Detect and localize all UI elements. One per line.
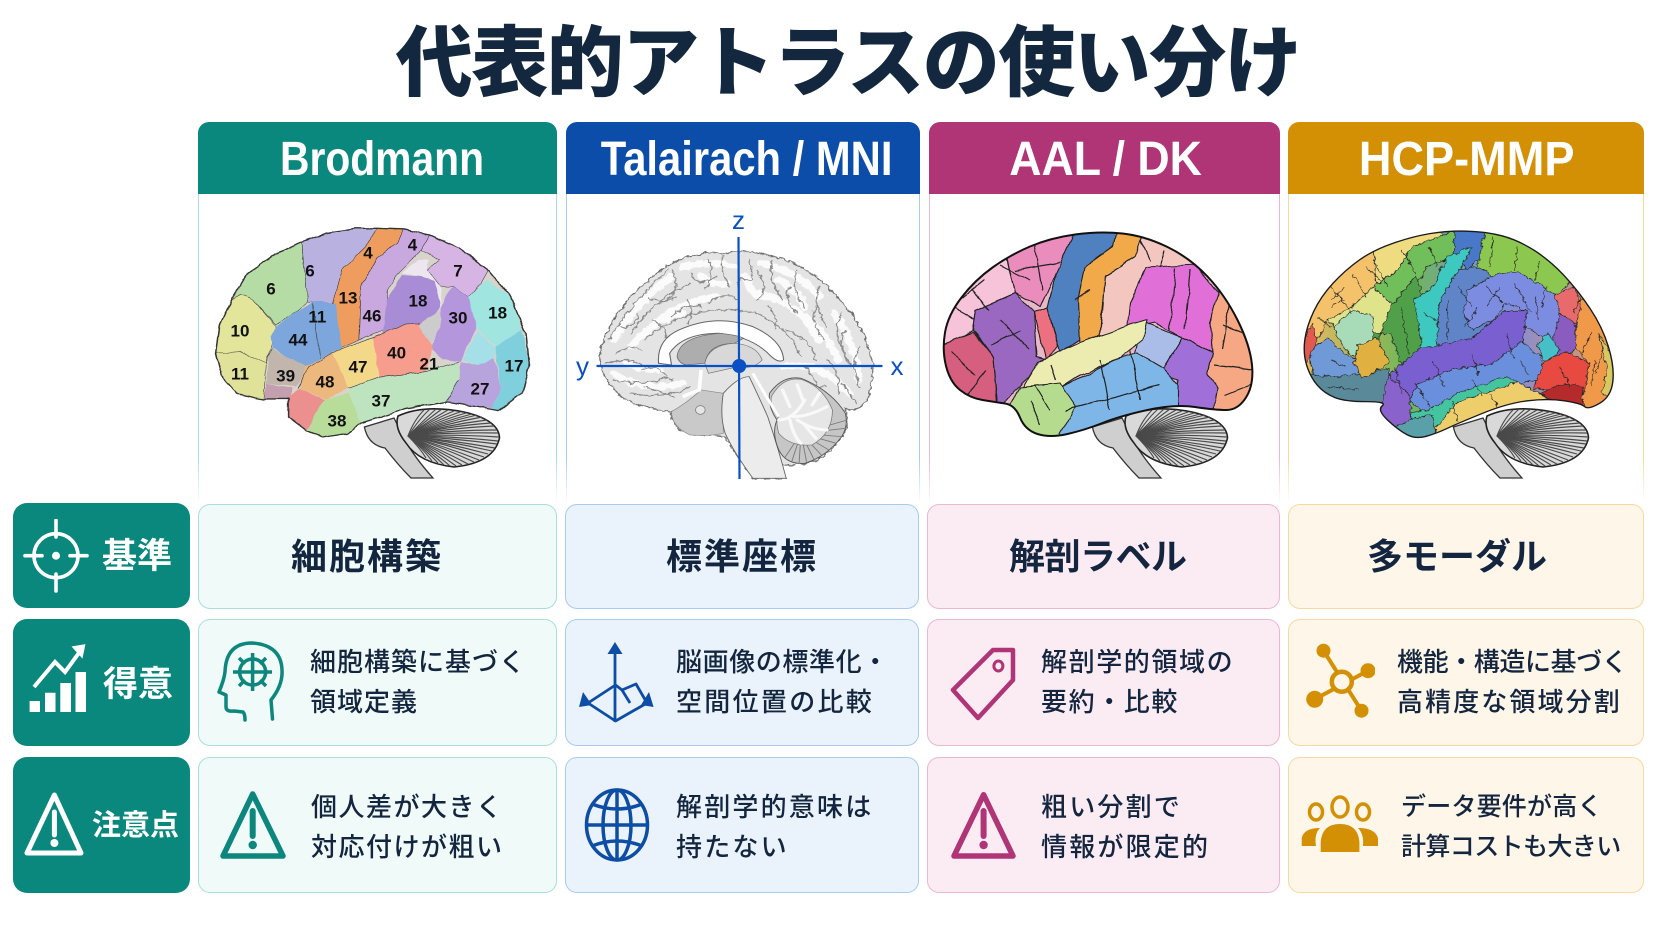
icon: tag <box>950 648 1016 720</box>
heading: HCP-MMP: HCP-MMP <box>1359 133 1575 186</box>
illustration: Brodmann numbered brain: 6 <box>305 262 315 280</box>
illustration: Brodmann numbered brain: 10 <box>231 322 249 340</box>
illustration: Brodmann numbered brain: 4 <box>363 244 373 262</box>
text: Talairach 注意点: 解剖学的意味は <box>676 792 873 822</box>
label text: 注意点 <box>92 810 179 842</box>
icon: warning pink <box>951 792 1016 859</box>
row label: 注意点 <box>13 757 190 893</box>
text: Brodmann 注意点: 個人差が大きく <box>311 792 504 822</box>
illustration: Brodmann numbered brain: 21 <box>420 354 438 374</box>
illustration: Brodmann numbered brain: 18 <box>409 292 427 310</box>
text: AAL 注意点: 粗い分割で <box>1041 792 1182 822</box>
panel: AAL brain image <box>929 194 1280 504</box>
value: 多モーダル: 多モーダル <box>1367 536 1547 577</box>
icon: 3D axes <box>579 642 654 722</box>
axes: x y z <box>576 205 903 479</box>
icon: people <box>1302 795 1378 852</box>
card: Talairach 基準 <box>565 504 918 609</box>
text: Talairach 注意点 <box>676 792 873 862</box>
heading: AAL / DK <box>929 122 1280 194</box>
text: Brodmann 注意点 <box>311 792 504 862</box>
icon: warning teal <box>220 791 286 859</box>
illustration: HCP-MMP multicolored brain <box>1304 230 1614 479</box>
icon: rising chart <box>30 644 86 712</box>
text: AAL 得意 <box>1041 647 1234 717</box>
illustration: sagittal brain with xyz axes <box>576 205 904 480</box>
value: 解剖ラベル: 解剖ラベル <box>1009 536 1187 577</box>
card: AAL 注意点 <box>926 757 1280 893</box>
illustration: Brodmann numbered brain: 40 <box>387 344 406 362</box>
heading: Talairach / MNI: Talairach / MNI <box>601 133 893 186</box>
illustration: Brodmann numbered brain: 13 <box>339 288 357 308</box>
illustration: Brodmann numbered brain: 44 <box>289 330 308 350</box>
panel: Brodmann brain image <box>198 194 557 504</box>
text: Talairach 注意点: 持たない <box>676 832 789 862</box>
title: 代表的アトラスの使い分け <box>396 21 1300 107</box>
illustration: Brodmann numbered brain: 17 <box>505 356 523 376</box>
text: Brodmann 注意点: 対応付けが粗い <box>311 832 504 862</box>
illustration: Brodmann numbered brain: 27 <box>471 380 489 398</box>
card: HCP 得意 <box>1288 619 1644 746</box>
card: HCP 注意点 <box>1288 757 1644 893</box>
icon: warning triangle <box>24 792 84 856</box>
illustration: Brodmann numbered brain: 11 <box>231 364 249 384</box>
text: AAL 注意点 <box>1041 792 1210 862</box>
illustration: Brodmann numbered brain: 6 <box>266 280 276 298</box>
card: Talairach 注意点 <box>565 757 918 893</box>
card: HCP 基準 <box>1288 504 1644 609</box>
illustration: Brodmann numbered brain: 46 <box>363 306 381 326</box>
illustration: Brodmann numbered brain: 38 <box>328 412 346 430</box>
icon: target <box>23 519 89 593</box>
text: HCP 注意点 <box>1401 793 1621 861</box>
panel: HCP-MMP brain image <box>1288 194 1644 504</box>
card: Talairach 得意 <box>565 619 918 746</box>
card: Brodmann 注意点 <box>198 757 557 893</box>
heading: AAL / DK: AAL / DK <box>1009 133 1202 186</box>
illustration: Brodmann numbered brain: 37 <box>372 392 390 410</box>
illustration: AAL colored brain <box>942 232 1254 479</box>
text: HCP 注意点: 計算コストも大きい <box>1401 833 1621 861</box>
text: AAL 得意: 要約・比較 <box>1041 687 1179 717</box>
text: Brodmann 得意 <box>310 647 526 717</box>
text: HCP 得意: 高精度な領域分割 <box>1397 687 1622 717</box>
axes: x y z: y <box>576 351 588 381</box>
text: AAL 得意: 解剖学的領域の <box>1041 647 1234 677</box>
text: AAL 注意点: 情報が限定的 <box>1041 832 1210 862</box>
illustration: Brodmann numbered brain: 30 <box>449 308 467 328</box>
text: Brodmann 得意: 細胞構築に基づく <box>310 647 526 677</box>
illustration: Brodmann numbered brain <box>214 227 530 479</box>
heading: Brodmann: Brodmann <box>280 133 484 186</box>
illustration: Brodmann numbered brain: 48 <box>316 372 334 392</box>
heading: Talairach / MNI <box>566 122 920 194</box>
card: Brodmann 得意 <box>198 619 557 746</box>
text: HCP 得意 <box>1397 647 1627 717</box>
text: HCP 得意: 機能・構造に基づく <box>1397 647 1627 677</box>
illustration: Brodmann numbered brain: 7 <box>453 262 463 280</box>
icon: head with gear <box>217 641 284 722</box>
icon: network <box>1306 644 1375 718</box>
card: AAL 得意 <box>926 619 1280 746</box>
row label: 得意 <box>13 619 190 746</box>
text: Talairach 得意: 脳画像の標準化・ <box>676 647 889 677</box>
text: Talairach 得意: 空間位置の比較 <box>676 687 874 717</box>
value: 標準座標: 標準座標 <box>666 536 818 577</box>
label text: 基準 <box>102 537 172 576</box>
illustration: Brodmann numbered brain: 39 <box>276 366 295 386</box>
illustration: Brodmann numbered brain: 47 <box>349 358 367 376</box>
axes: x y z: x <box>890 351 903 381</box>
text: HCP 注意点: データ要件が高く <box>1401 793 1603 821</box>
label text: 得意 <box>103 665 173 704</box>
card: Brodmann 基準 <box>198 504 557 609</box>
text: Brodmann 得意: 領域定義 <box>310 687 418 717</box>
text: Talairach 得意 <box>676 647 889 717</box>
icon: globe <box>584 788 650 862</box>
heading: Brodmann <box>198 122 557 194</box>
illustration: Brodmann numbered brain: 11 <box>308 308 326 326</box>
axes: x y z: z <box>732 205 744 235</box>
illustration: Brodmann numbered brain: 18 <box>488 304 507 322</box>
card: AAL 基準 <box>926 504 1280 609</box>
panel: Talairach brain image <box>566 194 920 504</box>
heading: HCP-MMP <box>1288 122 1644 194</box>
illustration: Brodmann numbered brain: 4 <box>408 236 418 254</box>
row label: 基準 <box>13 503 190 608</box>
value: 細胞構築: 細胞構築 <box>291 536 443 577</box>
